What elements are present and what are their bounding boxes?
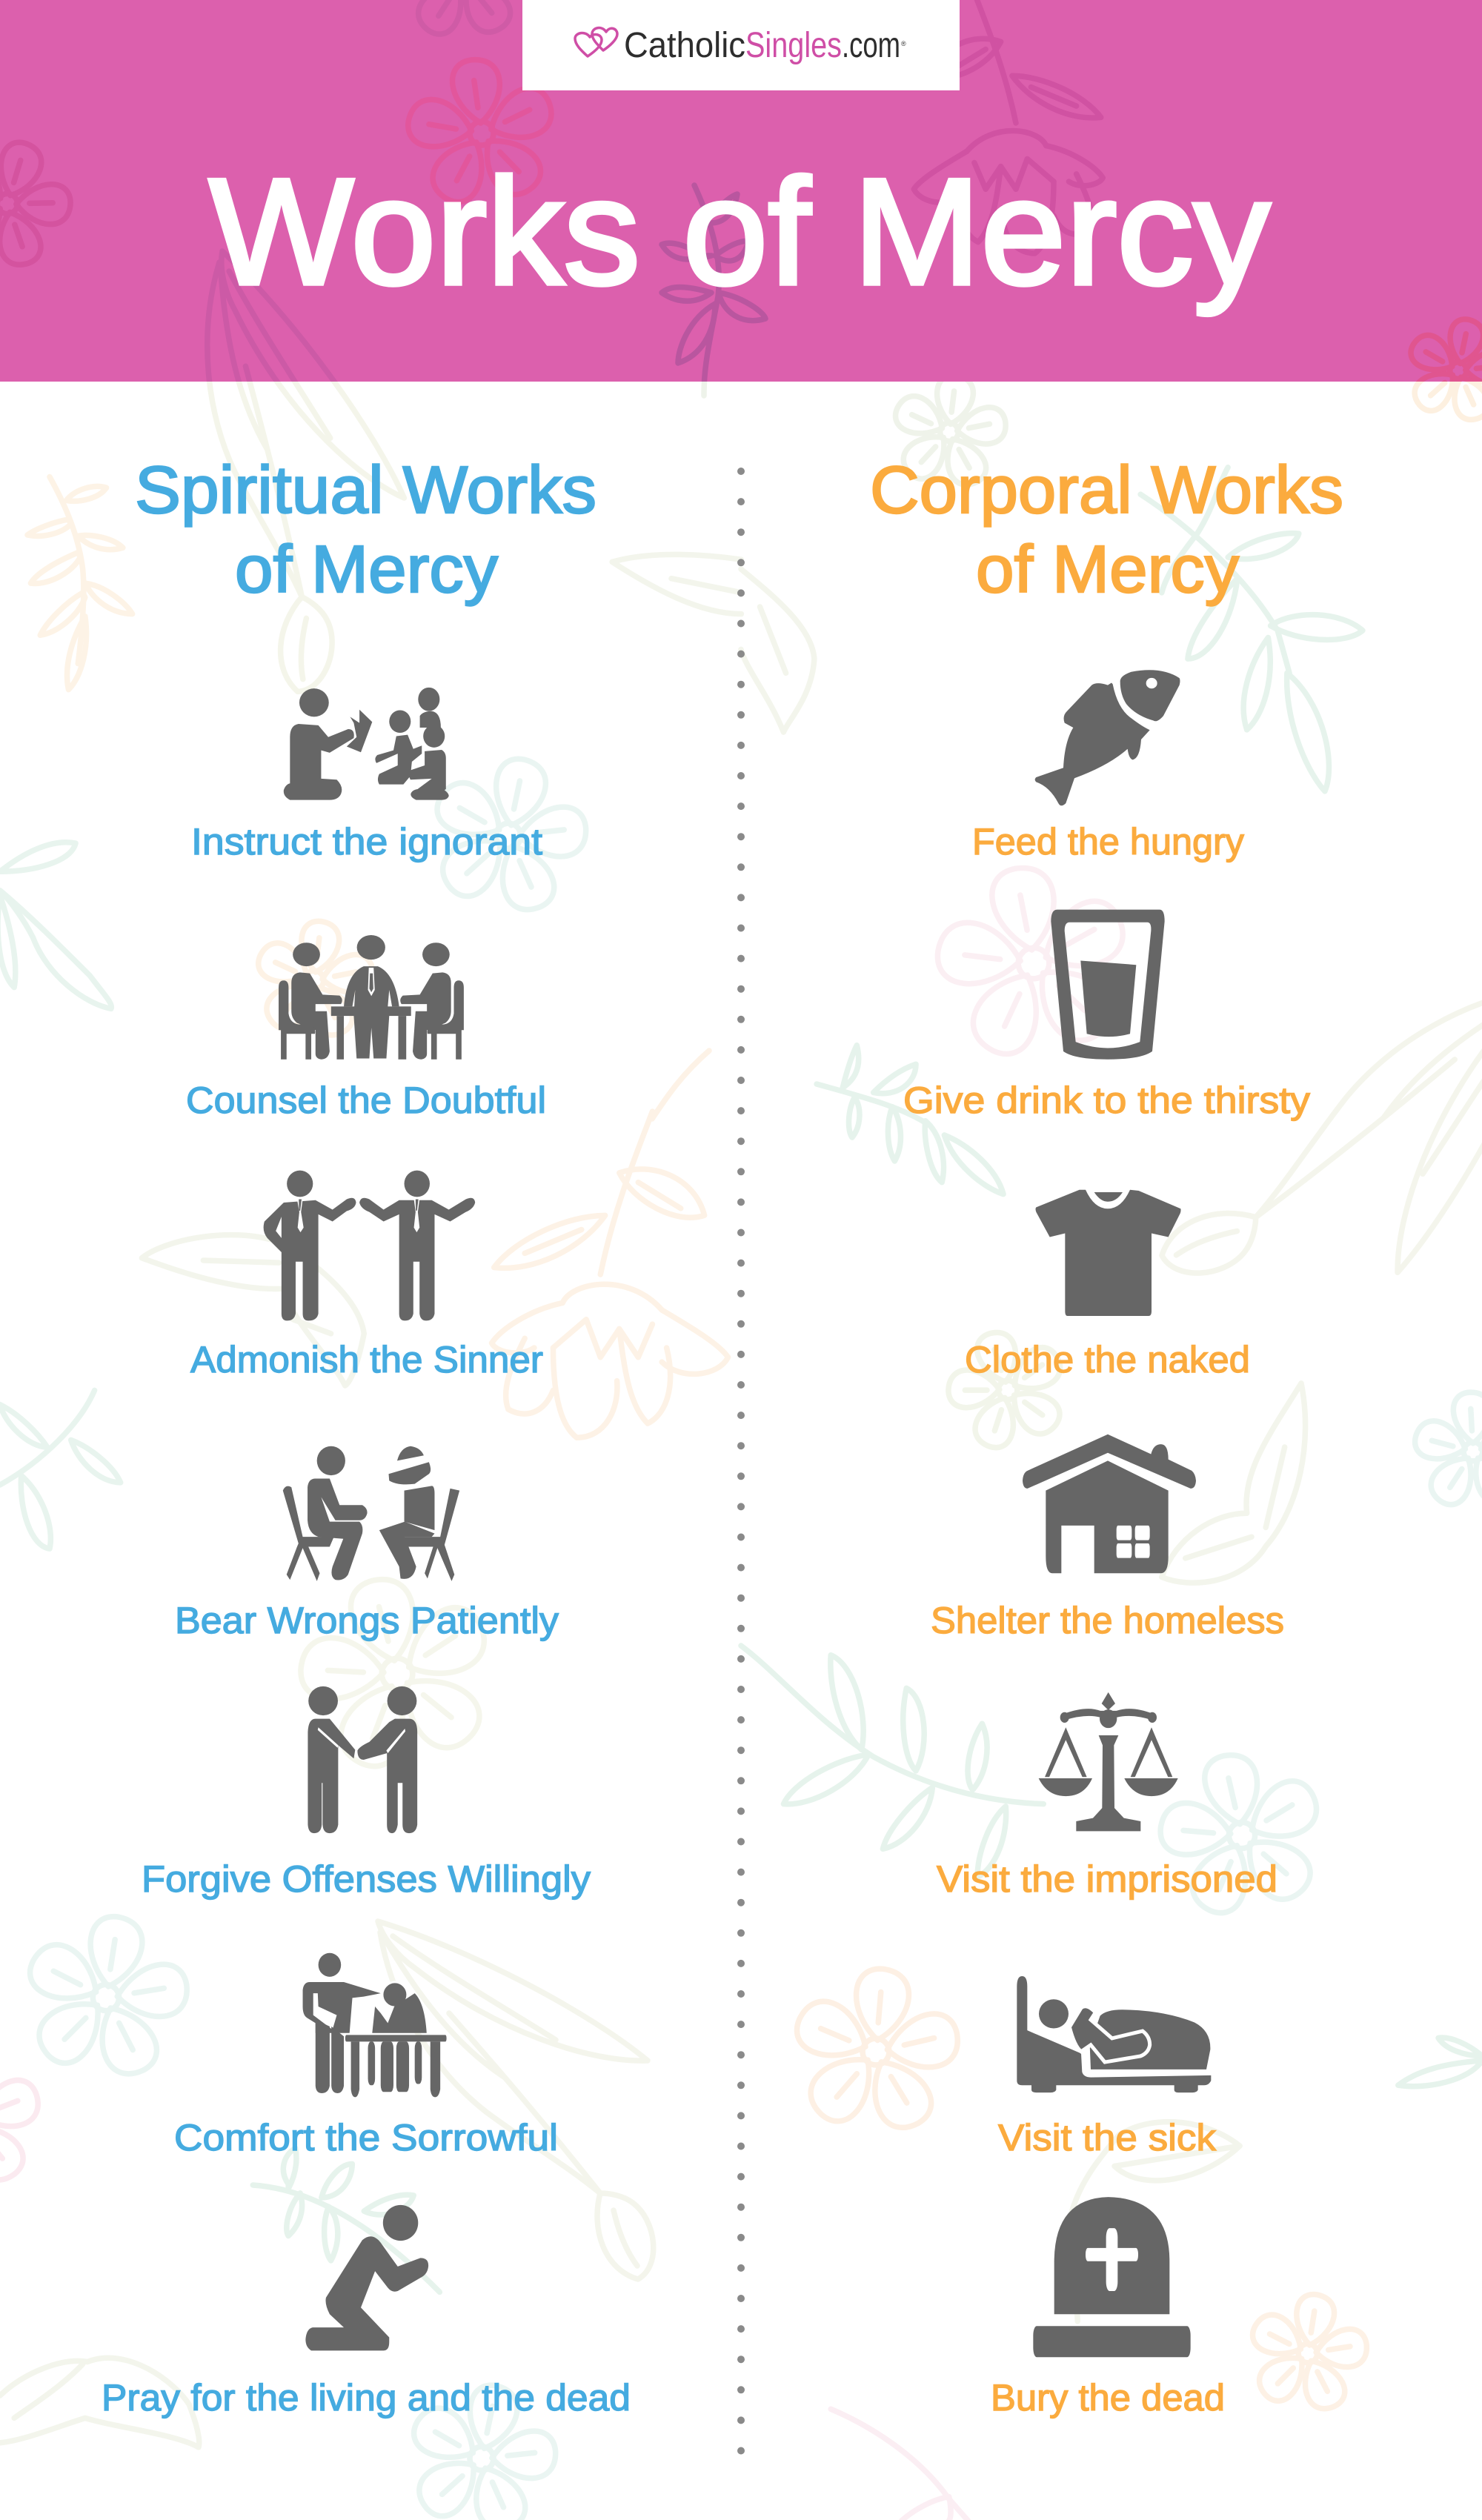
label: clothe: Clothe the naked (965, 1339, 1250, 1380)
label: bury: Bury the dead (991, 2377, 1225, 2418)
label: visit sick: Visit the sick (998, 2117, 1217, 2158)
icon: glass of water (1051, 910, 1165, 1060)
heading: corporal works: Corporal Works (870, 453, 1343, 528)
icon: admonish (264, 1171, 475, 1320)
heading: spiritual works: Spiritual Works (135, 453, 597, 528)
header band (0, 0, 1482, 382)
logo wordmark: Singles (745, 26, 842, 65)
logo wordmark: .com (842, 26, 900, 65)
logo wordmark: ® (901, 40, 906, 47)
green leaves right edge (1398, 2038, 1482, 2087)
icon: bear wrongs (283, 1446, 459, 1581)
cream leaves near divider (741, 569, 814, 732)
icon: t-shirt (1035, 1190, 1181, 1316)
pink stem bottom (831, 2409, 968, 2520)
green sprig left middle (0, 1390, 121, 1549)
cream leaf behind house (1162, 1383, 1306, 1583)
logo hearts icon (575, 28, 617, 56)
label: admonish: Admonish the Sinner (190, 1339, 543, 1380)
large green sprig right (741, 1646, 1043, 1878)
panel: spiritual works (102, 453, 631, 2418)
cream leaf bottom left (0, 2358, 199, 2447)
logo wordmark: Catholic (624, 26, 745, 65)
label: bear wrongs: Bear Wrongs Patiently (175, 1600, 559, 1641)
green sprig near thirsty (817, 1045, 1003, 1194)
label: forgive: Forgive Offenses Willingly (142, 1858, 591, 1900)
icon: tombstone (1033, 2197, 1191, 2357)
icon: scales (1039, 1692, 1178, 1831)
icon: counsel (279, 935, 464, 1060)
orange sprig top left (27, 477, 133, 690)
green sprig behind pray (253, 2148, 439, 2292)
label: feed: Feed the hungry (972, 821, 1244, 862)
stem below header (704, 370, 705, 396)
icon: sick bed (1017, 1976, 1211, 2092)
heading: spiritual works (135, 453, 597, 607)
label: give drink: Give drink to the thirsty (903, 1080, 1310, 1121)
green sprig left (0, 842, 111, 1008)
label: comfort: Comfort the Sorrowful (174, 2117, 558, 2158)
icon: fish (1035, 670, 1180, 805)
column divider dotted line (737, 471, 745, 2453)
logo box (522, 0, 960, 90)
heading: spiritual works: of Mercy (235, 533, 498, 607)
icon: house (1023, 1434, 1196, 1573)
heading: corporal works (870, 453, 1343, 607)
sprig stem up to tulip (652, 1051, 709, 1119)
label: pray: Pray for the living and the dead (102, 2377, 631, 2418)
heading: corporal works: of Mercy (976, 533, 1239, 607)
panel: corporal works (870, 453, 1343, 2418)
cream leaf behind admonish (142, 1235, 364, 1386)
label: imprisoned: Visit the imprisoned (937, 1858, 1277, 1900)
icon: forgive (308, 1686, 417, 1833)
icon: comfort (303, 1953, 447, 2097)
label: counsel: Counsel the Doubtful (186, 1080, 546, 1121)
label: instruct: Instruct the ignorant (191, 821, 542, 862)
label: shelter: Shelter the homeless (931, 1600, 1284, 1641)
cream leaf behind tombstone (1072, 2122, 1240, 2321)
green sprig top right (1140, 468, 1363, 791)
icon: instruct (284, 688, 449, 800)
icon: pray (305, 2205, 428, 2350)
title: Works of Mercy (209, 147, 1270, 316)
